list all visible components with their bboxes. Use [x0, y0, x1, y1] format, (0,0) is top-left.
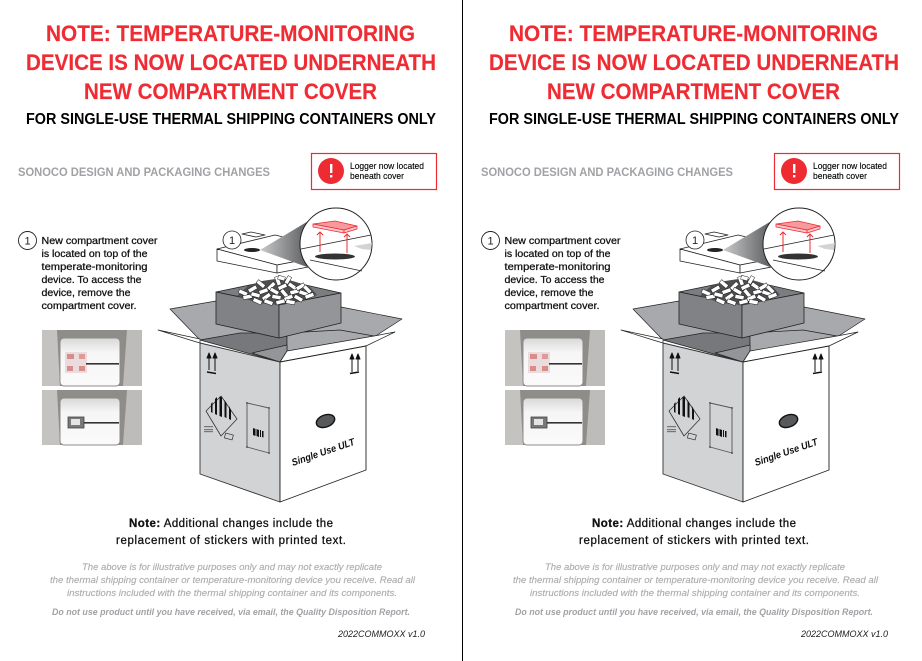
red cover [313, 221, 357, 233]
panel: left page [18, 21, 437, 640]
packing peanuts [700, 275, 780, 306]
left face [663, 343, 743, 502]
note text [579, 518, 809, 547]
step marker on lid: 1 [229, 235, 235, 247]
arrows [317, 232, 350, 253]
step 1 text [482, 232, 621, 312]
inner foam box [216, 279, 341, 338]
box interior [200, 330, 374, 362]
subtitle: FOR SINGLE-USE THERMAL SHIPPING CONTAINERS ONLY [489, 111, 900, 128]
disclaimer: instructions included with the thermal shipping container and its components. [530, 588, 860, 598]
compartment lid [680, 232, 808, 273]
disclaimer: Do not use product until you have received, via email, the Quality Disposition Report. [515, 607, 873, 617]
label placeholder with barcode [246, 402, 270, 454]
compartment lid [217, 232, 345, 273]
step 1 text: New compartment cover [42, 235, 158, 247]
panel: right page [481, 21, 900, 640]
step 1 text: device. To access the [42, 274, 142, 286]
callout: logger location: Logger now located [813, 161, 887, 171]
note text: Note: Additional changes include the [592, 518, 796, 530]
box label: Single Use ULT [753, 437, 820, 469]
step 1 text: is located on top of the [504, 248, 611, 260]
illustration: shipping box [621, 208, 865, 502]
inner foam box [679, 279, 804, 338]
magnifier [763, 208, 835, 280]
callout: logger location: beneath cover [350, 171, 404, 181]
note text: replacement of stickers with printed text. [579, 535, 809, 547]
version code: 2022COMMOXX v1.0 [800, 629, 889, 640]
callout: logger location: beneath cover [813, 171, 867, 181]
right face [743, 346, 829, 502]
back flaps [633, 301, 865, 340]
photo: device exposed [505, 390, 605, 445]
section heading: SONOCO DESIGN AND PACKAGING CHANGES [18, 165, 270, 179]
disclaimer: The above is for illustrative purposes only and may not exactly replicate [82, 562, 382, 572]
subtitle: FOR SINGLE-USE THERMAL SHIPPING CONTAINERS ONLY [26, 111, 437, 128]
magnifier cone [260, 220, 310, 267]
disclaimer: The above is for illustrative purposes only and may not exactly replicate [545, 562, 845, 572]
section heading: SONOCO DESIGN AND PACKAGING CHANGES [481, 165, 733, 179]
step 1 text: temperate-monitoring [504, 261, 611, 273]
back flaps [170, 301, 402, 340]
note text: Note: Additional changes include the [129, 518, 333, 530]
step marker on lid: 1 [692, 235, 698, 247]
note text: replacement of stickers with printed text. [116, 535, 346, 547]
front flaps [158, 330, 395, 362]
step 1 text: 1 [487, 236, 494, 248]
icon: this-way-up left [670, 353, 680, 374]
photo: device exposed [42, 390, 142, 445]
red cover [776, 221, 820, 233]
title: NEW COMPARTMENT COVER [84, 79, 377, 104]
photo: cover in place [42, 330, 142, 386]
handle [778, 412, 799, 430]
step 1 text: device. To access the [504, 274, 605, 286]
disclaimer: the thermal shipping container or temperature-monitoring device you receive. Read all [513, 575, 879, 585]
title: NEW COMPARTMENT COVER [547, 79, 840, 104]
step marker on lid [686, 231, 704, 249]
icon: this-way-up right [350, 354, 360, 374]
icon: this-way-up right [813, 354, 823, 374]
step 1 text: New compartment cover [504, 235, 621, 247]
icon: this-way-up left [207, 353, 217, 374]
note text [116, 518, 346, 547]
callout: logger location [312, 154, 436, 190]
magnifier [300, 208, 372, 280]
step 1 text: compartment cover. [42, 300, 136, 312]
step 1 text [18, 232, 158, 312]
divider line [462, 0, 464, 661]
handle [315, 412, 336, 430]
title [489, 21, 899, 104]
disclaimer: instructions included with the thermal shipping container and its components. [67, 588, 397, 598]
step 1 text: is located on top of the [42, 248, 148, 260]
front flaps [621, 330, 858, 362]
photo: cover in place [505, 330, 605, 386]
step marker on lid [223, 231, 241, 249]
callout: logger location [774, 154, 900, 190]
step 1 text: compartment cover. [504, 300, 600, 312]
disclaimer: the thermal shipping container or temperature-monitoring device you receive. Read all [50, 575, 416, 585]
step 1 text: device, remove the [504, 287, 594, 299]
step 1 text: device, remove the [42, 287, 131, 299]
step 1 text: 1 [24, 236, 31, 248]
callout: logger location: Logger now located [350, 161, 424, 171]
title [26, 21, 436, 104]
magnifier cone [723, 220, 773, 267]
right face [280, 346, 366, 502]
box interior [663, 330, 837, 362]
step 1 text: temperate-monitoring [42, 261, 148, 273]
icon: hazmat diamond [204, 396, 237, 440]
title: DEVICE IS NOW LOCATED UNDERNEATH [26, 50, 436, 75]
arrows [780, 232, 813, 253]
illustration: shipping box [158, 208, 402, 502]
disclaimer [50, 562, 416, 617]
packing peanuts [237, 275, 317, 306]
box label: Single Use ULT [290, 437, 357, 469]
icon: hazmat diamond [667, 396, 700, 440]
label placeholder with barcode [709, 402, 733, 454]
version code: 2022COMMOXX v1.0 [337, 629, 426, 640]
title: NOTE: TEMPERATURE-MONITORING [509, 21, 878, 46]
left face [200, 343, 280, 502]
title: NOTE: TEMPERATURE-MONITORING [46, 21, 415, 46]
disclaimer: Do not use product until you have received, via email, the Quality Disposition Report. [52, 607, 410, 617]
disclaimer [513, 562, 879, 617]
